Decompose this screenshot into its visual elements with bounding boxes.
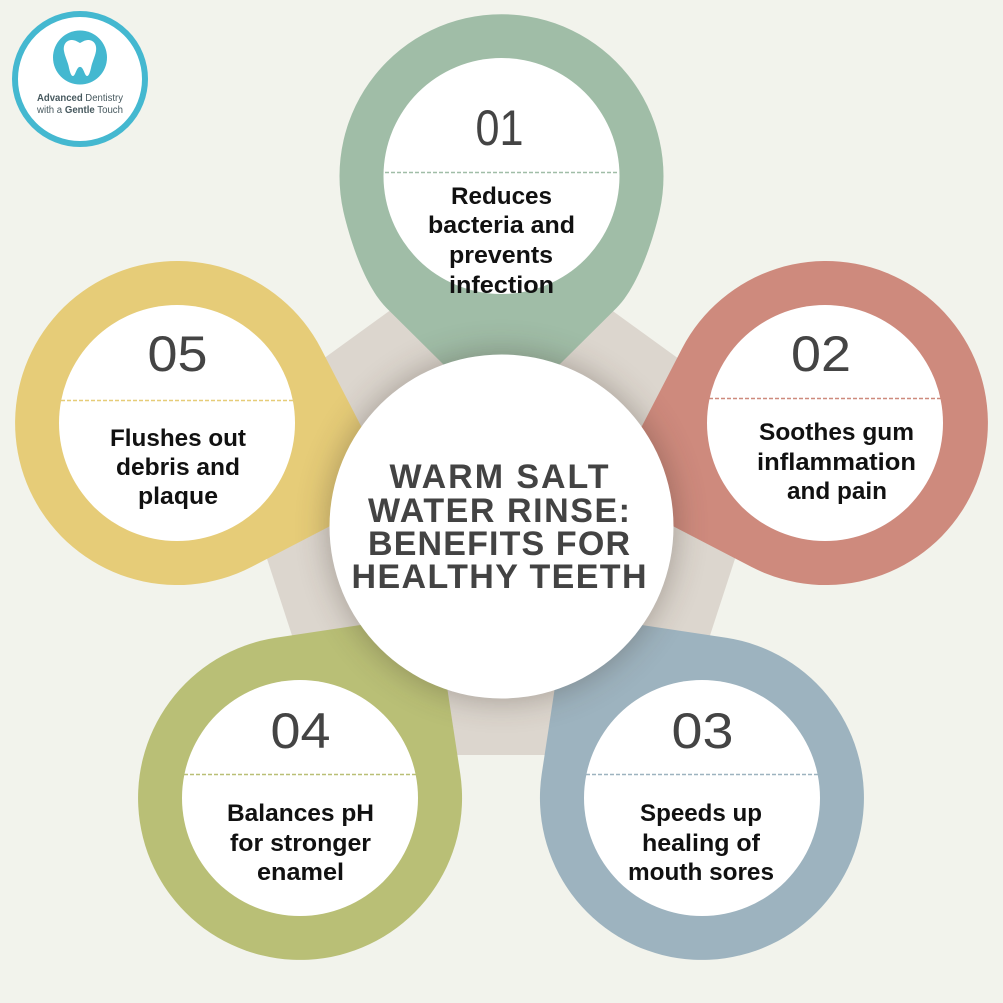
title: WARM SALT — [390, 458, 609, 496]
item 01: bacteria and — [428, 212, 575, 239]
item 05: Flushes out — [110, 425, 246, 452]
title — [352, 458, 646, 596]
logo: with a Gentle Touch — [36, 105, 123, 116]
logo — [15, 14, 145, 144]
item 03: 03 — [672, 703, 734, 759]
item 04: 04 — [270, 703, 330, 759]
centre circle — [330, 354, 674, 698]
item 01: Reduces — [451, 183, 552, 210]
item 04 — [182, 680, 418, 916]
item 04: for stronger — [230, 830, 371, 857]
item 05: debris and — [116, 454, 240, 481]
pin 01 shape — [340, 14, 664, 422]
item 02: inflammation — [757, 449, 916, 476]
icon: tooth — [53, 30, 107, 84]
title: BENEFITS FOR — [368, 525, 630, 563]
item 03: healing of — [642, 830, 761, 857]
item 05: 05 — [148, 326, 208, 382]
item 03: Speeds up — [640, 800, 762, 827]
item 05 — [59, 305, 295, 541]
item 01: prevents — [449, 242, 553, 269]
item 03: mouth sores — [628, 859, 774, 886]
item 04: Balances pH — [227, 800, 374, 827]
item 02: Soothes gum — [759, 419, 914, 446]
pin 03 shape — [436, 518, 928, 1003]
item 01: 01 — [476, 100, 524, 156]
item 05: plaque — [138, 483, 218, 510]
item 01: infection — [449, 272, 554, 299]
item 02: 02 — [791, 326, 851, 382]
title: HEALTHY TEETH — [352, 558, 646, 596]
pin 02 shape — [559, 220, 1003, 647]
logo text: Advanced Dentistry — [37, 93, 123, 104]
item 01 — [384, 58, 620, 299]
item 03 — [584, 680, 820, 916]
item 04: enamel — [257, 859, 344, 886]
item 02 — [707, 305, 943, 541]
item 02: and pain — [787, 478, 887, 505]
pin 05 shape — [0, 220, 444, 647]
title: WATER RINSE: — [368, 492, 630, 530]
pin 04 shape — [74, 518, 566, 1003]
centre circle shadow — [328, 352, 676, 700]
background pentagon — [225, 230, 777, 755]
